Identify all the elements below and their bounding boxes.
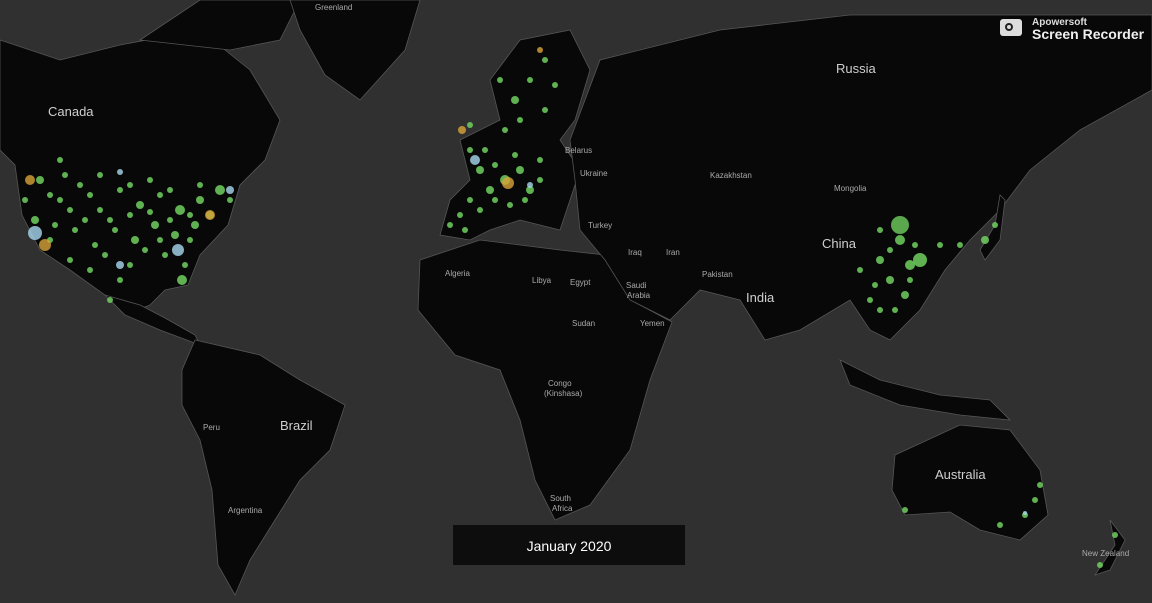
- world map: Sudan: [572, 319, 595, 328]
- map labels: Canada: [48, 104, 94, 119]
- map labels: [48, 61, 986, 482]
- land: south america: [182, 340, 345, 595]
- world map: New Zealand: [1082, 549, 1129, 558]
- world map: Libya: [532, 276, 552, 285]
- date label box: [453, 525, 685, 565]
- world map: Greenland: [315, 3, 352, 12]
- world map: Kazakhstan: [710, 171, 752, 180]
- world map: Congo: [548, 379, 572, 388]
- logo: Apowersoft: [1032, 17, 1087, 28]
- world map: Iran: [666, 248, 680, 257]
- map labels: Australia: [935, 467, 986, 482]
- land: greenland: [290, 0, 420, 100]
- logo: [1000, 17, 1144, 42]
- world map: Egypt: [570, 278, 591, 287]
- world map: Iraq: [628, 248, 642, 257]
- map labels: India: [746, 290, 775, 305]
- land: north america: [0, 30, 280, 315]
- map labels: China: [822, 236, 857, 251]
- land: new zealand: [1095, 520, 1125, 575]
- world map: Arabia: [627, 291, 651, 300]
- date label box: January 2020: [527, 538, 611, 554]
- land: europe: [440, 30, 590, 240]
- world map: Yemen: [640, 319, 665, 328]
- land: australia: [892, 425, 1048, 540]
- logo: Screen Recorder: [1032, 26, 1144, 42]
- land: arctic islands: [140, 0, 300, 50]
- land: africa: [418, 240, 672, 520]
- world map: Belarus: [565, 146, 592, 155]
- world map: (Kinshasa): [544, 389, 583, 398]
- world map: Algeria: [445, 269, 470, 278]
- land: japan: [980, 195, 1005, 260]
- land: asia: [570, 15, 1152, 340]
- map labels: Brazil: [280, 418, 313, 433]
- world map: Peru: [203, 423, 220, 432]
- icon: camera: [1000, 19, 1022, 36]
- world map: Africa: [552, 504, 573, 513]
- land: central america: [105, 295, 200, 345]
- land: indonesia: [840, 360, 1010, 420]
- map labels: Russia: [836, 61, 877, 76]
- world map: Pakistan: [702, 270, 733, 279]
- world map: Ukraine: [580, 169, 608, 178]
- world map: Argentina: [228, 506, 263, 515]
- world map: Mongolia: [834, 184, 867, 193]
- world map: South: [550, 494, 571, 503]
- world map: Turkey: [588, 221, 612, 230]
- world map: Saudi: [626, 281, 647, 290]
